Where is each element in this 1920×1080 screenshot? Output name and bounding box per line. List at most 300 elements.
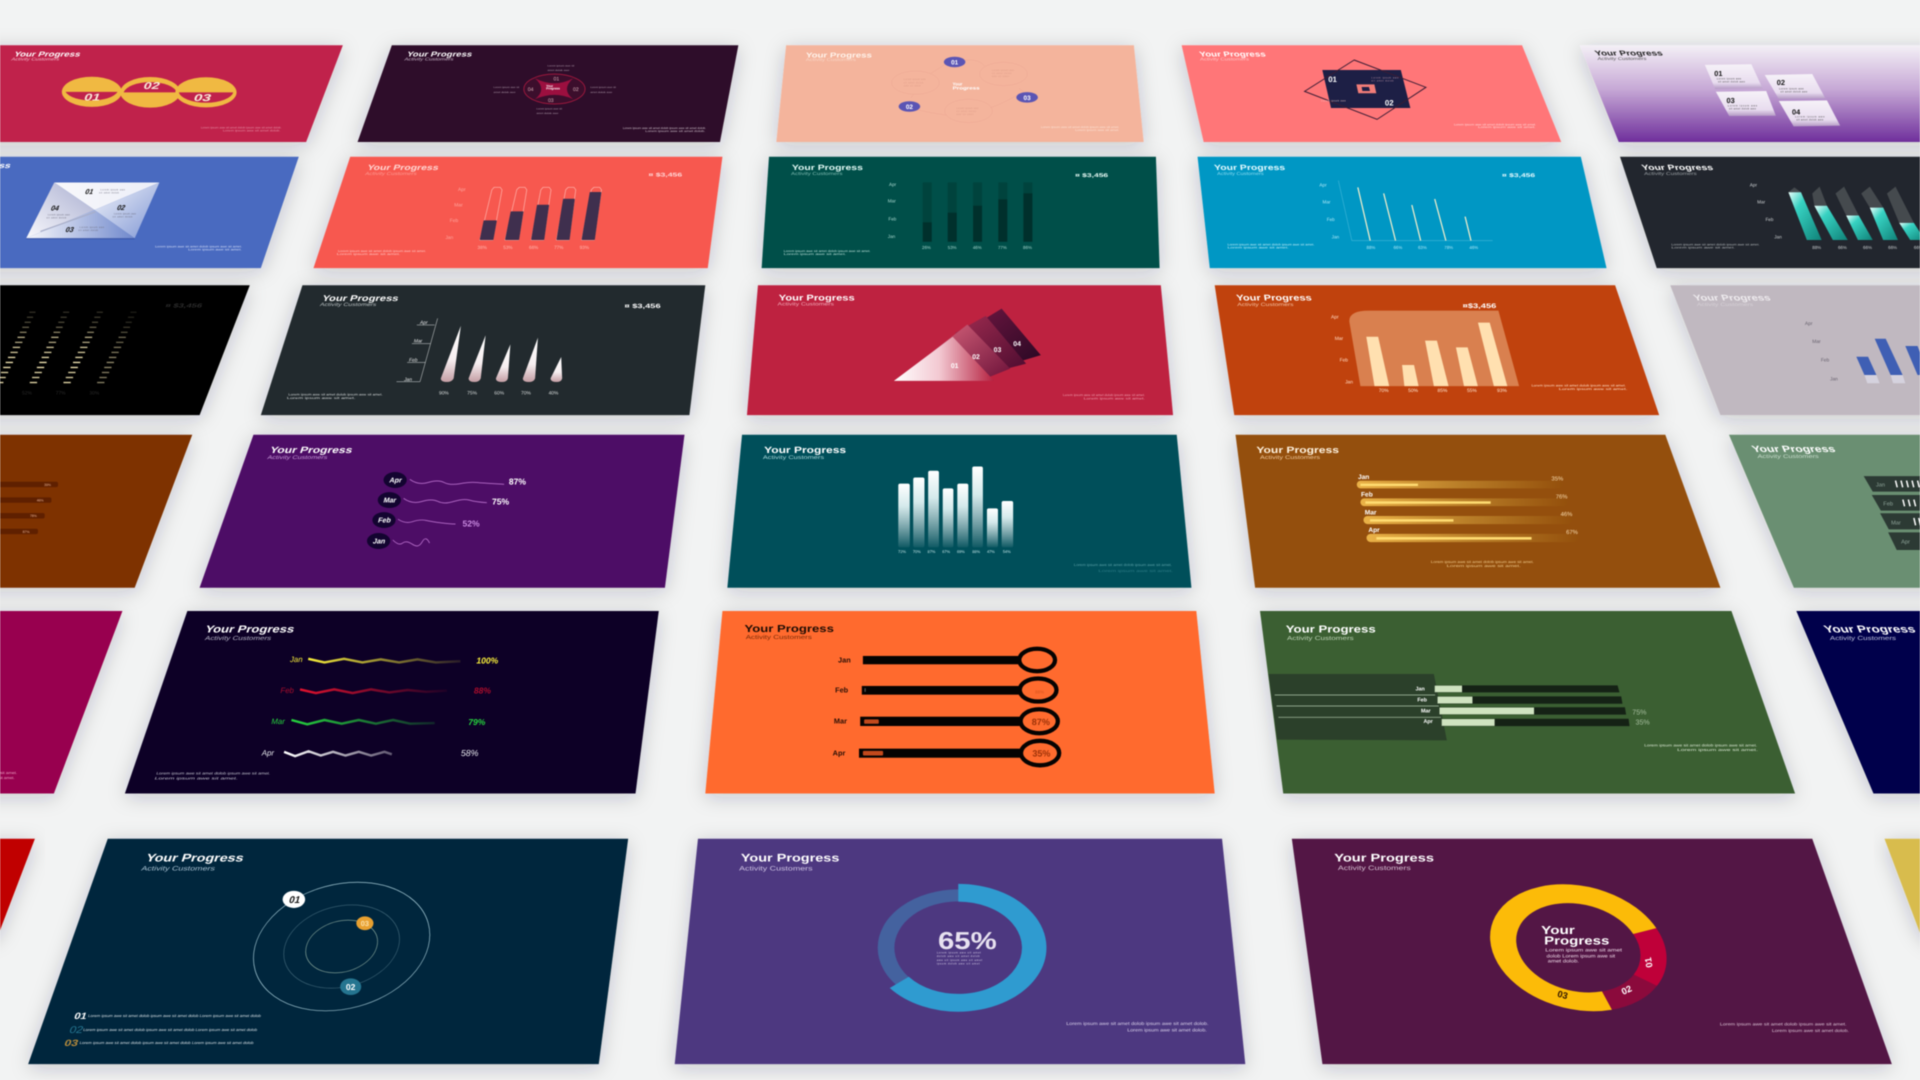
bar fills [923, 193, 1032, 242]
slide: peach cycle [776, 45, 1144, 142]
month labels: Feb [1417, 697, 1427, 703]
footnote: Lorem ipsum awe sit amet dolob ipsum awe sit amet dolob. [201, 126, 282, 130]
diamond notes: Lorem ipsum awe [1371, 76, 1398, 80]
circle notes: sit amet dolob [956, 110, 976, 113]
footnote: Lorem ipsum awe sit amet. [1559, 388, 1628, 391]
subtitle: Activity Customers [1217, 171, 1264, 176]
ring centre heading: Your [1541, 924, 1575, 938]
column values: 52% [22, 389, 32, 396]
bar values: 69% [957, 549, 965, 554]
slide: red tube chart [313, 157, 722, 268]
footnote: Lorem ipsum awe sit amet. [1098, 568, 1174, 573]
axis labels: Mar [888, 199, 897, 204]
slide: purple donut 65% [675, 839, 1245, 1064]
footnote [1063, 394, 1146, 401]
bar tracks [0, 482, 58, 534]
bright fills [1360, 484, 1532, 540]
centre label: Your [953, 82, 963, 87]
donut note: ipsum dolob awe sit amet [937, 962, 980, 966]
bar values: 50% [1408, 387, 1419, 393]
axis labels: Jan [888, 234, 895, 239]
bar values: 67% [942, 549, 950, 554]
apr row [261, 748, 479, 759]
ring centre heading: Progress [1544, 935, 1609, 948]
donut note: dolob awe sit amet dolob [937, 955, 980, 958]
blue bars [1856, 339, 1920, 375]
title: Your Progress [1594, 51, 1664, 58]
slide: forest green bars [1260, 611, 1795, 793]
jan row: 100% [476, 658, 499, 666]
axis labels: Jan [1830, 376, 1838, 382]
slide: amber glowing bars [1236, 435, 1720, 588]
bar values: 78% [1444, 246, 1454, 250]
footnote [1720, 1022, 1849, 1033]
month labels: Jan [1358, 474, 1369, 481]
bar values [898, 549, 1011, 554]
circle notes [904, 69, 1014, 116]
tube values: 66% [529, 246, 539, 250]
legend: Lorem ipsum awe sit amet dolob ipsum awe sit amet dolob Lorem ipsum awe sit amet dolob [83, 1027, 258, 1032]
footnote [623, 127, 707, 133]
subtitle: Activity Customers [365, 171, 418, 176]
label 01: 01 [1328, 76, 1337, 84]
bar values: 93% [1497, 387, 1507, 393]
bar values: 46% [1469, 246, 1479, 250]
month labels: Mar [834, 718, 848, 726]
footnote: Lorem ipsum awe sit amet. [1447, 564, 1521, 568]
axis labels: Mar [1812, 338, 1821, 344]
axis labels: Mar [414, 338, 423, 344]
circle 03: 03 [192, 92, 214, 103]
tile 02: sit amet dolob awe [1780, 90, 1808, 94]
diamond labels: 04 [49, 204, 61, 213]
column values [22, 389, 100, 396]
footnote: Lorem ipsum awe sit amet dolob. [1772, 1028, 1849, 1033]
subtitle: Activity Customers [746, 634, 813, 642]
step 02 [933, 324, 1010, 381]
bar values [1367, 246, 1479, 250]
bar values: 66% [1863, 246, 1873, 250]
bar fills [863, 688, 883, 756]
ring centre note: amet dolob. [1548, 959, 1579, 964]
footnote [1531, 384, 1628, 391]
title: Your Progress [1692, 294, 1773, 303]
title: Your Progress [1750, 443, 1837, 454]
donut chart [886, 893, 1034, 1003]
bar values: 87% [23, 529, 30, 534]
title: Your Progress [144, 852, 246, 864]
axis labels: Mar [1322, 200, 1331, 205]
subtitle: Activity Customers [1697, 301, 1753, 307]
row labels: Apr [1901, 539, 1910, 545]
circle 03 [175, 77, 237, 107]
month labels: Feb [377, 516, 392, 525]
slide: plum progress ring [1292, 839, 1892, 1064]
title: Your Progress [406, 51, 473, 59]
slide: navy zigzag lines [125, 611, 659, 793]
slide: sage tick rows [1729, 435, 1920, 588]
step labels: 02 [972, 354, 980, 361]
circle notes: Lorem ipsum awe [956, 107, 978, 110]
row labels: Feb [1883, 501, 1894, 507]
cone values: 60% [494, 389, 505, 396]
slide: dark teal bars [762, 157, 1160, 268]
footnote [337, 250, 427, 256]
tile 01: Lorem ipsum awe [1717, 77, 1742, 81]
percent values: 46% [1561, 511, 1573, 519]
diamond outline [1305, 60, 1426, 119]
diamond notes: sit amet dolob [113, 215, 132, 219]
month labels: Mar [1421, 708, 1431, 714]
radial notes: amet dolob awe [493, 91, 516, 94]
subtitle: Activity Customers [204, 635, 273, 642]
column values: 30% [89, 389, 100, 396]
title: Your Progress [741, 852, 839, 864]
subtitle: Activity Customers [1597, 56, 1647, 61]
tile 02: 02 [1777, 79, 1786, 88]
footnote [201, 126, 282, 133]
slide: rust horizontal bars [0, 435, 192, 588]
radial notes: Lorem ipsum awe sit [590, 86, 617, 89]
diamond labels: 02 [115, 204, 127, 212]
ring labels: 01 [1642, 957, 1655, 969]
subtitle: Activity Customers [1200, 57, 1250, 62]
axis labels: Mar [454, 201, 464, 208]
tile 03: sit amet dolob awe [1729, 107, 1757, 111]
slide: magenta edge [0, 611, 122, 793]
circle 01: 01 [82, 92, 103, 103]
title: Your Progress [1822, 623, 1918, 635]
footnote: Lorem ipsum awe sit amet dolob ipsum awe sit amet. [1063, 394, 1145, 397]
axis labels: Feb [450, 217, 459, 223]
bar values: 54% [1003, 549, 1011, 554]
legend: 02 [68, 1024, 86, 1035]
axis labels: Apr [458, 186, 466, 192]
circle 02: 02 [142, 80, 163, 91]
legend: Lorem ipsum awe sit amet dolob ipsum awe sit amet dolob Lorem ipsum awe sit amet dolob [88, 1013, 261, 1018]
cones [441, 326, 562, 382]
donut note: awe sit ipsum awe sit amet [937, 958, 982, 962]
bar values: 66% [1888, 246, 1898, 250]
column values: 77% [56, 389, 66, 396]
tile 01: 01 [1714, 70, 1723, 78]
tube values: 77% [554, 246, 564, 250]
gradient bars [898, 467, 1013, 547]
bar values: 78% [30, 514, 37, 518]
teal bars [1788, 192, 1920, 240]
ring label 03: 03 [1556, 988, 1569, 1002]
radial ring: 02 [573, 86, 580, 92]
thin bars [1358, 187, 1471, 241]
footnote: Lorem ipsum awe sit amet. [1075, 129, 1120, 132]
node 01 [283, 891, 305, 908]
back bars [1788, 187, 1914, 223]
axis labels [1805, 320, 1838, 382]
feb row: 88% [474, 688, 492, 696]
donut value: 65% [938, 928, 997, 955]
percent values: 67% [1566, 529, 1579, 537]
ring centre note [1545, 948, 1624, 964]
bar values: 70% [913, 549, 921, 554]
tube fills [480, 193, 601, 239]
diamond notes: Lorem ipsum awe [48, 213, 70, 217]
legend: 01 [73, 1010, 89, 1021]
title: Your Progress [1199, 51, 1267, 59]
bar tracks [1435, 685, 1630, 726]
month labels: Apr [1368, 527, 1381, 534]
footnote [1041, 126, 1120, 132]
tile 03: Lorem ipsum awe [1728, 104, 1758, 108]
slide: teal gradient columns [727, 435, 1191, 588]
mar row: 79% [468, 719, 486, 727]
footnote: Lorem ipsum awe sit amet dolob ipsum awe sit amet. [1228, 243, 1315, 247]
bar values [1379, 387, 1507, 393]
value: ¤ $3,456 [1075, 172, 1109, 178]
axis labels [1750, 183, 1782, 240]
cone values: 40% [549, 389, 559, 396]
donut note: Lorem ipsum awe sit amet [937, 951, 981, 955]
axis labels: Feb [888, 217, 896, 222]
circle notes: awe sit amet [992, 75, 1010, 78]
reflections [1864, 375, 1905, 383]
subtitle: Activity Customers [1260, 454, 1320, 460]
month badges [367, 472, 407, 549]
subtitle: Activity Customers [1830, 635, 1897, 642]
subtitle: Activity Customers [11, 57, 61, 62]
folded diamond [26, 182, 159, 239]
bar values: 46% [973, 246, 983, 250]
footnote: Lorem ipsum awe sit amet. [784, 253, 847, 256]
tube values: 53% [503, 246, 513, 250]
percent values: 35% [1551, 476, 1564, 483]
percent values: 75% [492, 498, 510, 507]
axis labels: Feb [1340, 357, 1349, 363]
tile 03: 03 [1727, 97, 1736, 105]
axis labels: Jan [1345, 379, 1353, 385]
diamond notes: sit amet dolob [1371, 79, 1393, 83]
apr row: 58% [461, 748, 479, 759]
slide: blue folded diamond [0, 157, 299, 268]
diamond notes: Lorem ipsum awe [114, 212, 136, 216]
slide: cyan line bars [1198, 157, 1607, 268]
title: Your Progress [1641, 164, 1715, 173]
footnote: Lorem ipsum awe sit amet dolob ipsum awe sit amet. [288, 393, 383, 397]
bar values: 55% [1467, 387, 1477, 393]
slide: black dashed columns [0, 285, 250, 415]
footnote: Lorem ipsum awe sit amet dolob ipsum awe sit amet. [1720, 1022, 1847, 1027]
subtitle: Activity Customers [1287, 635, 1355, 642]
tile 04: Lorem ipsum awe [1795, 115, 1826, 119]
bar values [1812, 246, 1920, 250]
diamond notes: sit amet dolob [47, 216, 66, 220]
cone values: 75% [467, 389, 477, 396]
mar row: Mar [271, 718, 286, 726]
panel dividers [1275, 695, 1441, 717]
bar values: 26% [922, 246, 932, 250]
tracks [1357, 481, 1578, 542]
tile 02 [1765, 74, 1825, 99]
month labels: Mar [1365, 509, 1378, 517]
axis labels [403, 319, 428, 382]
axis labels: Feb [1765, 217, 1773, 222]
row labels [1876, 482, 1910, 545]
slide: burnt orange bar chart [1215, 285, 1659, 415]
axis labels: Apr [1319, 183, 1328, 188]
radial ring [524, 74, 585, 104]
title: Your Progress [1286, 623, 1376, 635]
slide: charcoal cone chart [261, 285, 705, 415]
value: ¤ $3,456 [624, 303, 661, 311]
axis labels: Jan [445, 234, 453, 240]
circle notes: awe sit amet [956, 113, 974, 116]
legend: Lorem ipsum awe sit amet dolob ipsum awe sit amet dolob Lorem ipsum awe sit amet dolob [80, 1040, 254, 1045]
circle 02 [120, 77, 180, 108]
title: Your Progress [764, 444, 846, 456]
footnote [1431, 559, 1534, 568]
bar values: 39% [44, 482, 52, 487]
bar values: 86% [1023, 246, 1033, 250]
axis labels: Mar [1757, 200, 1766, 205]
percent values: 87% [509, 478, 527, 487]
bar values: 66% [1838, 246, 1848, 250]
radial notes: Lorem ipsum awe sit [547, 64, 575, 68]
bar values: 63% [1418, 246, 1428, 250]
ring label 02: 02 [1620, 983, 1634, 997]
diamond notes [1321, 76, 1398, 103]
axis labels: Jan [403, 376, 413, 382]
centre label: Progress [953, 86, 980, 91]
circle notes: sit amet dolob [904, 81, 923, 84]
footnote [784, 250, 871, 256]
title: Your Progress [779, 294, 855, 303]
bar values [922, 246, 1033, 250]
month labels: Feb [835, 687, 849, 695]
footnote: Lorem ipsum awe sit amet. [188, 248, 243, 252]
subtitle: Activity Customers [791, 171, 843, 176]
value: ¤$3,456 [1463, 303, 1496, 311]
circle notes: awe sit amet [904, 84, 921, 88]
footnote: Lorem ipsum awe sit amet dolob ipsum awe sit amet. [1454, 123, 1537, 127]
node 02 [899, 101, 920, 112]
axis labels [1319, 183, 1339, 240]
mar row [271, 718, 486, 727]
diamond labels: 03 [64, 226, 76, 234]
tile 03 [1716, 91, 1776, 116]
tile 02: Lorem ipsum awe [1779, 87, 1805, 91]
radial notes: Lorem ipsum awe sit [536, 107, 563, 111]
diamond labels [49, 188, 127, 234]
circle notes: Lorem ipsum awe [904, 78, 926, 81]
footnote: Lorem ipsum awe sit amet dolob. [1127, 1028, 1207, 1032]
radial ring: Your [546, 84, 553, 88]
dark square [1322, 70, 1410, 108]
month labels: Jan [1416, 686, 1425, 692]
legend: 03 [63, 1038, 80, 1049]
bar values: 47% [987, 549, 995, 554]
axis labels: Mar [1335, 335, 1344, 341]
step labels: 01 [951, 363, 958, 370]
title: Your Progress [792, 164, 864, 173]
subtitle: Activity Customers [140, 865, 217, 873]
node 02: 02 [906, 104, 913, 111]
footnote [1454, 123, 1537, 129]
title: Your Progress [321, 295, 400, 304]
month labels [372, 478, 403, 546]
footnote: Lorem ipsum awe sit amet dolob ipsum awe sit amet. [156, 771, 271, 776]
cone values: 70% [521, 389, 531, 396]
chart panel [1349, 311, 1519, 386]
tube values [478, 246, 590, 250]
axis labels: Feb [1327, 217, 1335, 222]
ring centre note: Lorem ipsum awe sit amet [1545, 948, 1624, 953]
title: Your Progress [269, 444, 354, 456]
footnote: Lorem ipsum awe sit amet dolob ipsum awe sit amet. [1431, 559, 1534, 564]
subtitle: Activity Customers [1338, 865, 1411, 872]
tile 04: 04 [1792, 108, 1801, 117]
step labels: 03 [994, 347, 1001, 354]
slide: purple wavy lines [200, 435, 684, 588]
orbits [239, 882, 444, 1011]
bar values: 72% [898, 549, 906, 554]
footnote: Lorem ipsum awe sit amet. [1228, 246, 1289, 250]
diamond notes: Lorem ipsum awe [1321, 99, 1346, 103]
radial notes: amet dolob awe [590, 91, 612, 94]
tile 04: sit amet dolob awe [1796, 118, 1824, 122]
subtitle: Activity Customers [1644, 171, 1697, 176]
footnote: Lorem ipsum awe sit amet dolob ipsum awe sit amet dolob. [1066, 1021, 1209, 1026]
label 02: 02 [1385, 99, 1394, 108]
axis labels: Apr [889, 182, 897, 187]
bar values: 53% [948, 246, 958, 250]
axis labels [888, 182, 897, 239]
axis labels: Jan [1332, 235, 1339, 240]
value: ¤ $3,456 [164, 302, 204, 310]
ring centre note: dolob Lorem ipsum awe sit [1547, 954, 1617, 959]
ring [1491, 894, 1665, 1002]
axis labels [1331, 314, 1353, 385]
title: Your Progress [1334, 852, 1434, 864]
subtitle: Activity Customers [319, 301, 377, 307]
footnote: Lorem ipsum awe sit amet dolob ipsum awe sit amet. [784, 250, 871, 253]
footnote: Lorem ipsum awe sit amet dolob ipsum awe sit amet. [155, 245, 243, 249]
percent values: 35% [1636, 718, 1650, 727]
ring values: 88% [1035, 690, 1045, 695]
footnote [155, 245, 243, 252]
subtitle: Activity Customers [1758, 453, 1819, 459]
tile 01 [1705, 64, 1763, 89]
step 01 [894, 337, 994, 381]
dashed columns [0, 312, 137, 383]
diamond notes: sit amet dolob [78, 228, 98, 232]
subtitle: Activity Customers [1237, 301, 1294, 307]
footnote [1066, 1021, 1209, 1032]
month labels [1416, 686, 1433, 724]
bar values [23, 482, 52, 534]
tube values: 93% [580, 246, 590, 250]
cone values [439, 389, 559, 396]
percent values [1551, 476, 1579, 537]
title: Your Progress [204, 623, 297, 635]
month labels: Jan [838, 656, 851, 665]
footnote [1671, 243, 1760, 250]
bar values: 77% [998, 246, 1008, 250]
diamond notes [47, 188, 136, 232]
slide: navy orbit diagram [28, 839, 628, 1064]
title: Your Progress [806, 53, 872, 60]
centre square [1356, 84, 1376, 93]
subtitle: Activity Customers [404, 57, 455, 62]
step 04 [973, 309, 1041, 362]
